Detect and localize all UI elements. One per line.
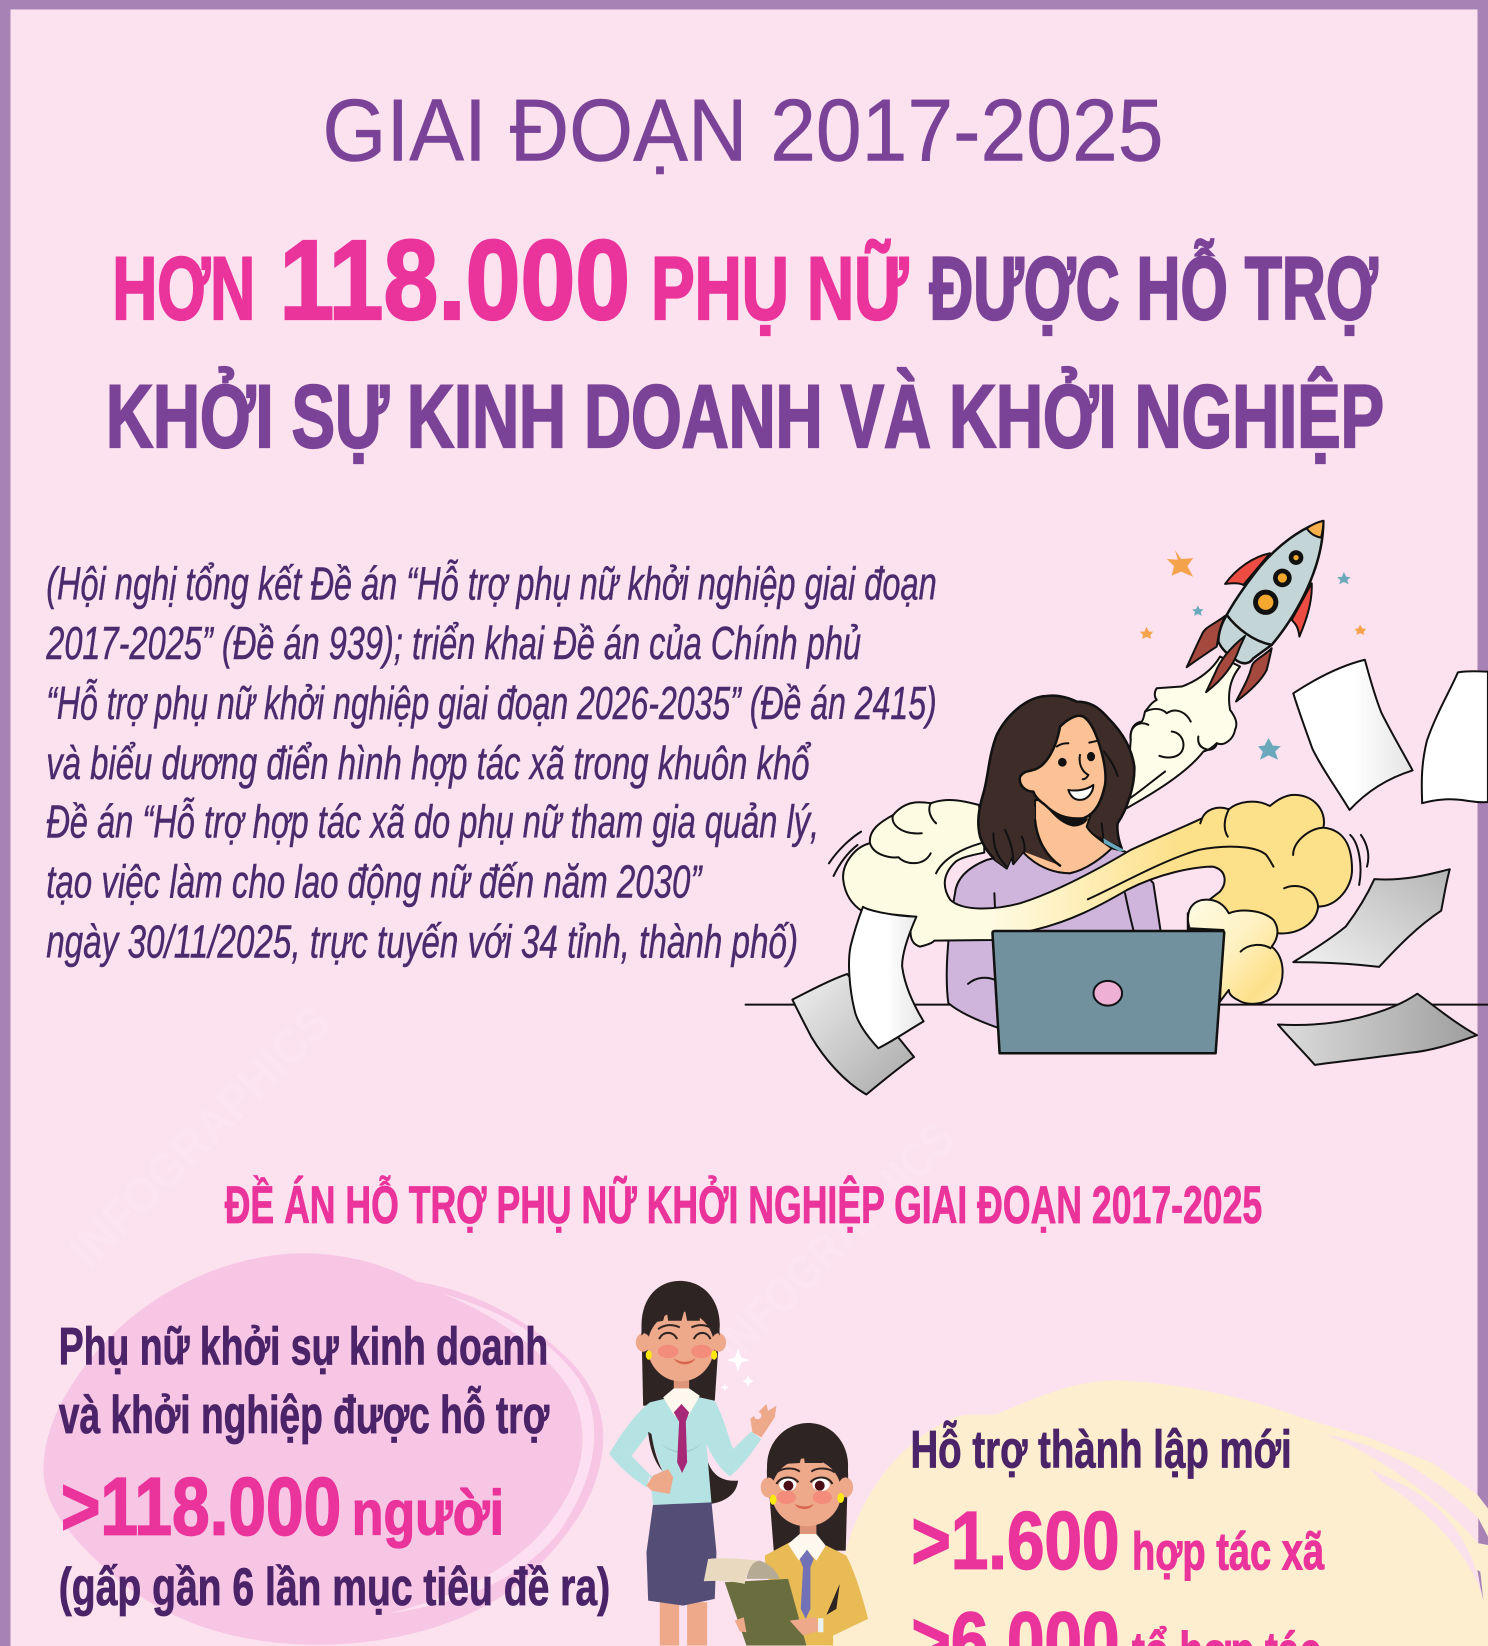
figure: woman in teal shirt <box>609 1281 776 1646</box>
intro paragraph: “Hỗ trợ phụ nữ khởi nghiệp giai đoạn 2026-2035” (Đề án 2415) <box>46 677 937 729</box>
intro paragraph: (Hội nghị tổng kết Đề án “Hỗ trợ phụ nữ khởi nghiệp giai đoạn <box>46 557 937 609</box>
title: period: GIAI ĐOẠN 2017-2025 <box>322 81 1164 180</box>
lower cloud <box>1188 900 1283 1004</box>
infographic canvas: INFOGRAPHICS <box>705 1112 966 1372</box>
stat text: women supported: Phụ nữ khởi sự kinh doanh <box>59 1318 548 1377</box>
intro paragraph: Đề án “Hỗ trợ hợp tác xã do phụ nữ tham gia quản lý, <box>46 796 819 848</box>
yellow blob <box>830 1380 1488 1646</box>
figure: woman in yellow cardigan <box>704 1423 868 1646</box>
intro paragraph: 2017-2025” (Đề án 939); triển khai Đề án của Chính phủ <box>45 617 861 669</box>
icon: rocket and smoke <box>1125 521 1323 809</box>
icon: woman sweater <box>947 848 1161 1028</box>
stat text: new cooperatives: >1.600 <box>911 1495 1119 1586</box>
stat text: women supported: và khởi nghiệp được hỗ trợ <box>59 1386 550 1445</box>
stat text: women supported: >118.000 <box>61 1462 341 1553</box>
intro paragraph: và biểu dương điển hình hợp tác xã trong khuôn khổ <box>46 737 811 789</box>
illustration: woman launching rocket from laptop <box>746 521 1488 1094</box>
icon: flying papers right <box>1278 660 1488 1065</box>
stat text: women supported: (gấp gần 6 lần mục tiêu đề ra) <box>59 1558 610 1617</box>
icon: exhaust cloud and swoosh <box>829 795 1368 1004</box>
intro paragraph <box>45 557 937 967</box>
infographic canvas: INFOGRAPHICS <box>59 995 342 1278</box>
intro paragraph: ngày 30/11/2025, trực tuyến với 34 tỉnh, thành phố) <box>46 915 798 967</box>
illustration: two businesswomen <box>609 1281 868 1646</box>
rocket smoke trail <box>1125 657 1240 809</box>
stat text: new cooperatives <box>910 1421 1325 1646</box>
stat text: new cooperatives: hợp tác xã <box>1132 1522 1325 1581</box>
panel: new cooperatives <box>830 1380 1488 1646</box>
headline <box>106 217 1384 466</box>
stat text: women supported: người <box>352 1479 504 1549</box>
stat text: women supported <box>59 1318 610 1617</box>
headline: pink figure: PHỤ NỮ <box>651 238 909 338</box>
icon: laptop <box>992 931 1224 1053</box>
pink blob <box>43 1253 603 1645</box>
headline: pink figure: HƠN <box>112 238 255 338</box>
icon: flying papers left <box>792 907 924 1094</box>
stat text: new cooperatives: Hỗ trợ thành lập mới <box>910 1421 1292 1480</box>
panel: women supported <box>43 1253 610 1645</box>
icon: woman head <box>978 696 1134 873</box>
icon: stars <box>1140 550 1366 760</box>
headline: purple text <box>106 238 1384 466</box>
headline: pink figure: 118.000 <box>279 217 630 344</box>
headline: pink figure <box>112 217 909 344</box>
intro paragraph: tạo việc làm cho lao động nữ đến năm 2030” <box>46 856 703 908</box>
